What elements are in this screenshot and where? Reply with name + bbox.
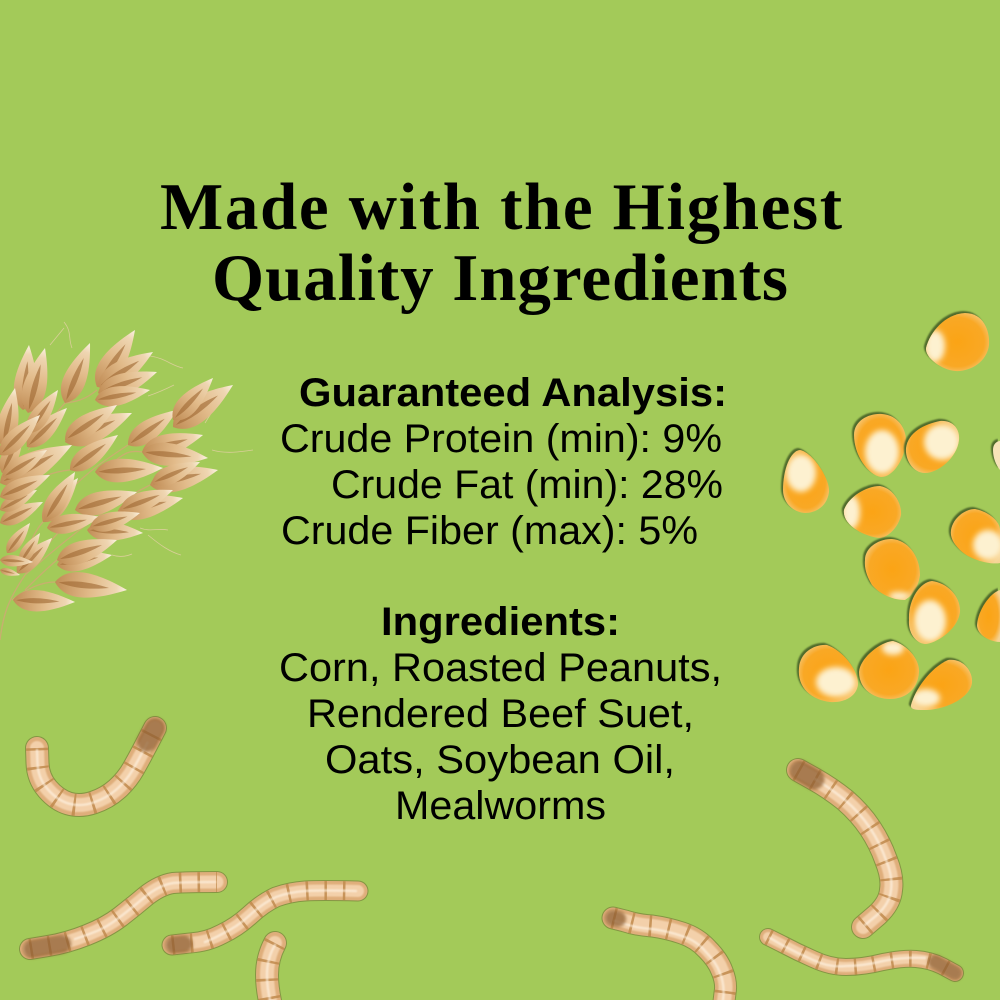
text block: ingredients: Rendered Beef Suet, — [307, 692, 694, 736]
illustration: mealworms — [30, 728, 955, 1000]
text block: ingredients: Mealworms — [395, 784, 606, 828]
illustration: corn kernels — [781, 311, 1000, 710]
text block: guaranteed analysis: Guaranteed Analysis: — [299, 371, 727, 415]
title: Quality Ingredients — [212, 241, 788, 315]
worm 6 — [798, 770, 891, 927]
kernel 4 — [781, 448, 829, 513]
text block: guaranteed analysis: Crude Fiber (max): 5% — [281, 509, 698, 553]
kernel 8 — [949, 507, 1000, 563]
kernel 6 — [863, 537, 920, 600]
text block: ingredients: Ingredients: — [381, 600, 620, 644]
kernel 3 — [904, 419, 960, 473]
worm 7 — [768, 937, 955, 973]
title: Made with the Highest — [160, 170, 843, 244]
worm 3 — [172, 890, 358, 945]
kernel 1 — [924, 311, 989, 371]
worm 4 — [267, 943, 275, 1000]
text block: ingredients: Oats, Soybean Oil, — [325, 738, 675, 782]
kernel 5 — [842, 484, 901, 538]
kernel 10 — [857, 639, 919, 699]
text block: guaranteed analysis: Crude Protein (min): 9% — [280, 417, 722, 461]
kernel 2 — [852, 412, 906, 477]
kernel 7 — [907, 579, 960, 644]
kernel 12 — [975, 588, 1000, 642]
title — [160, 170, 843, 315]
illustration: oat sprig — [0, 322, 253, 640]
kernel 9 — [797, 643, 858, 702]
text block: ingredients: Corn, Roasted Peanuts, — [279, 646, 722, 690]
kernel 11 — [909, 658, 972, 710]
text block: ingredients — [279, 600, 722, 828]
worm 5 — [613, 918, 726, 1000]
worm 1 — [37, 728, 155, 805]
kernel 13 — [991, 439, 1000, 470]
text block: guaranteed analysis — [280, 371, 727, 553]
worm 2 — [30, 882, 217, 949]
text block: guaranteed analysis: Crude Fat (min): 28% — [331, 463, 723, 507]
